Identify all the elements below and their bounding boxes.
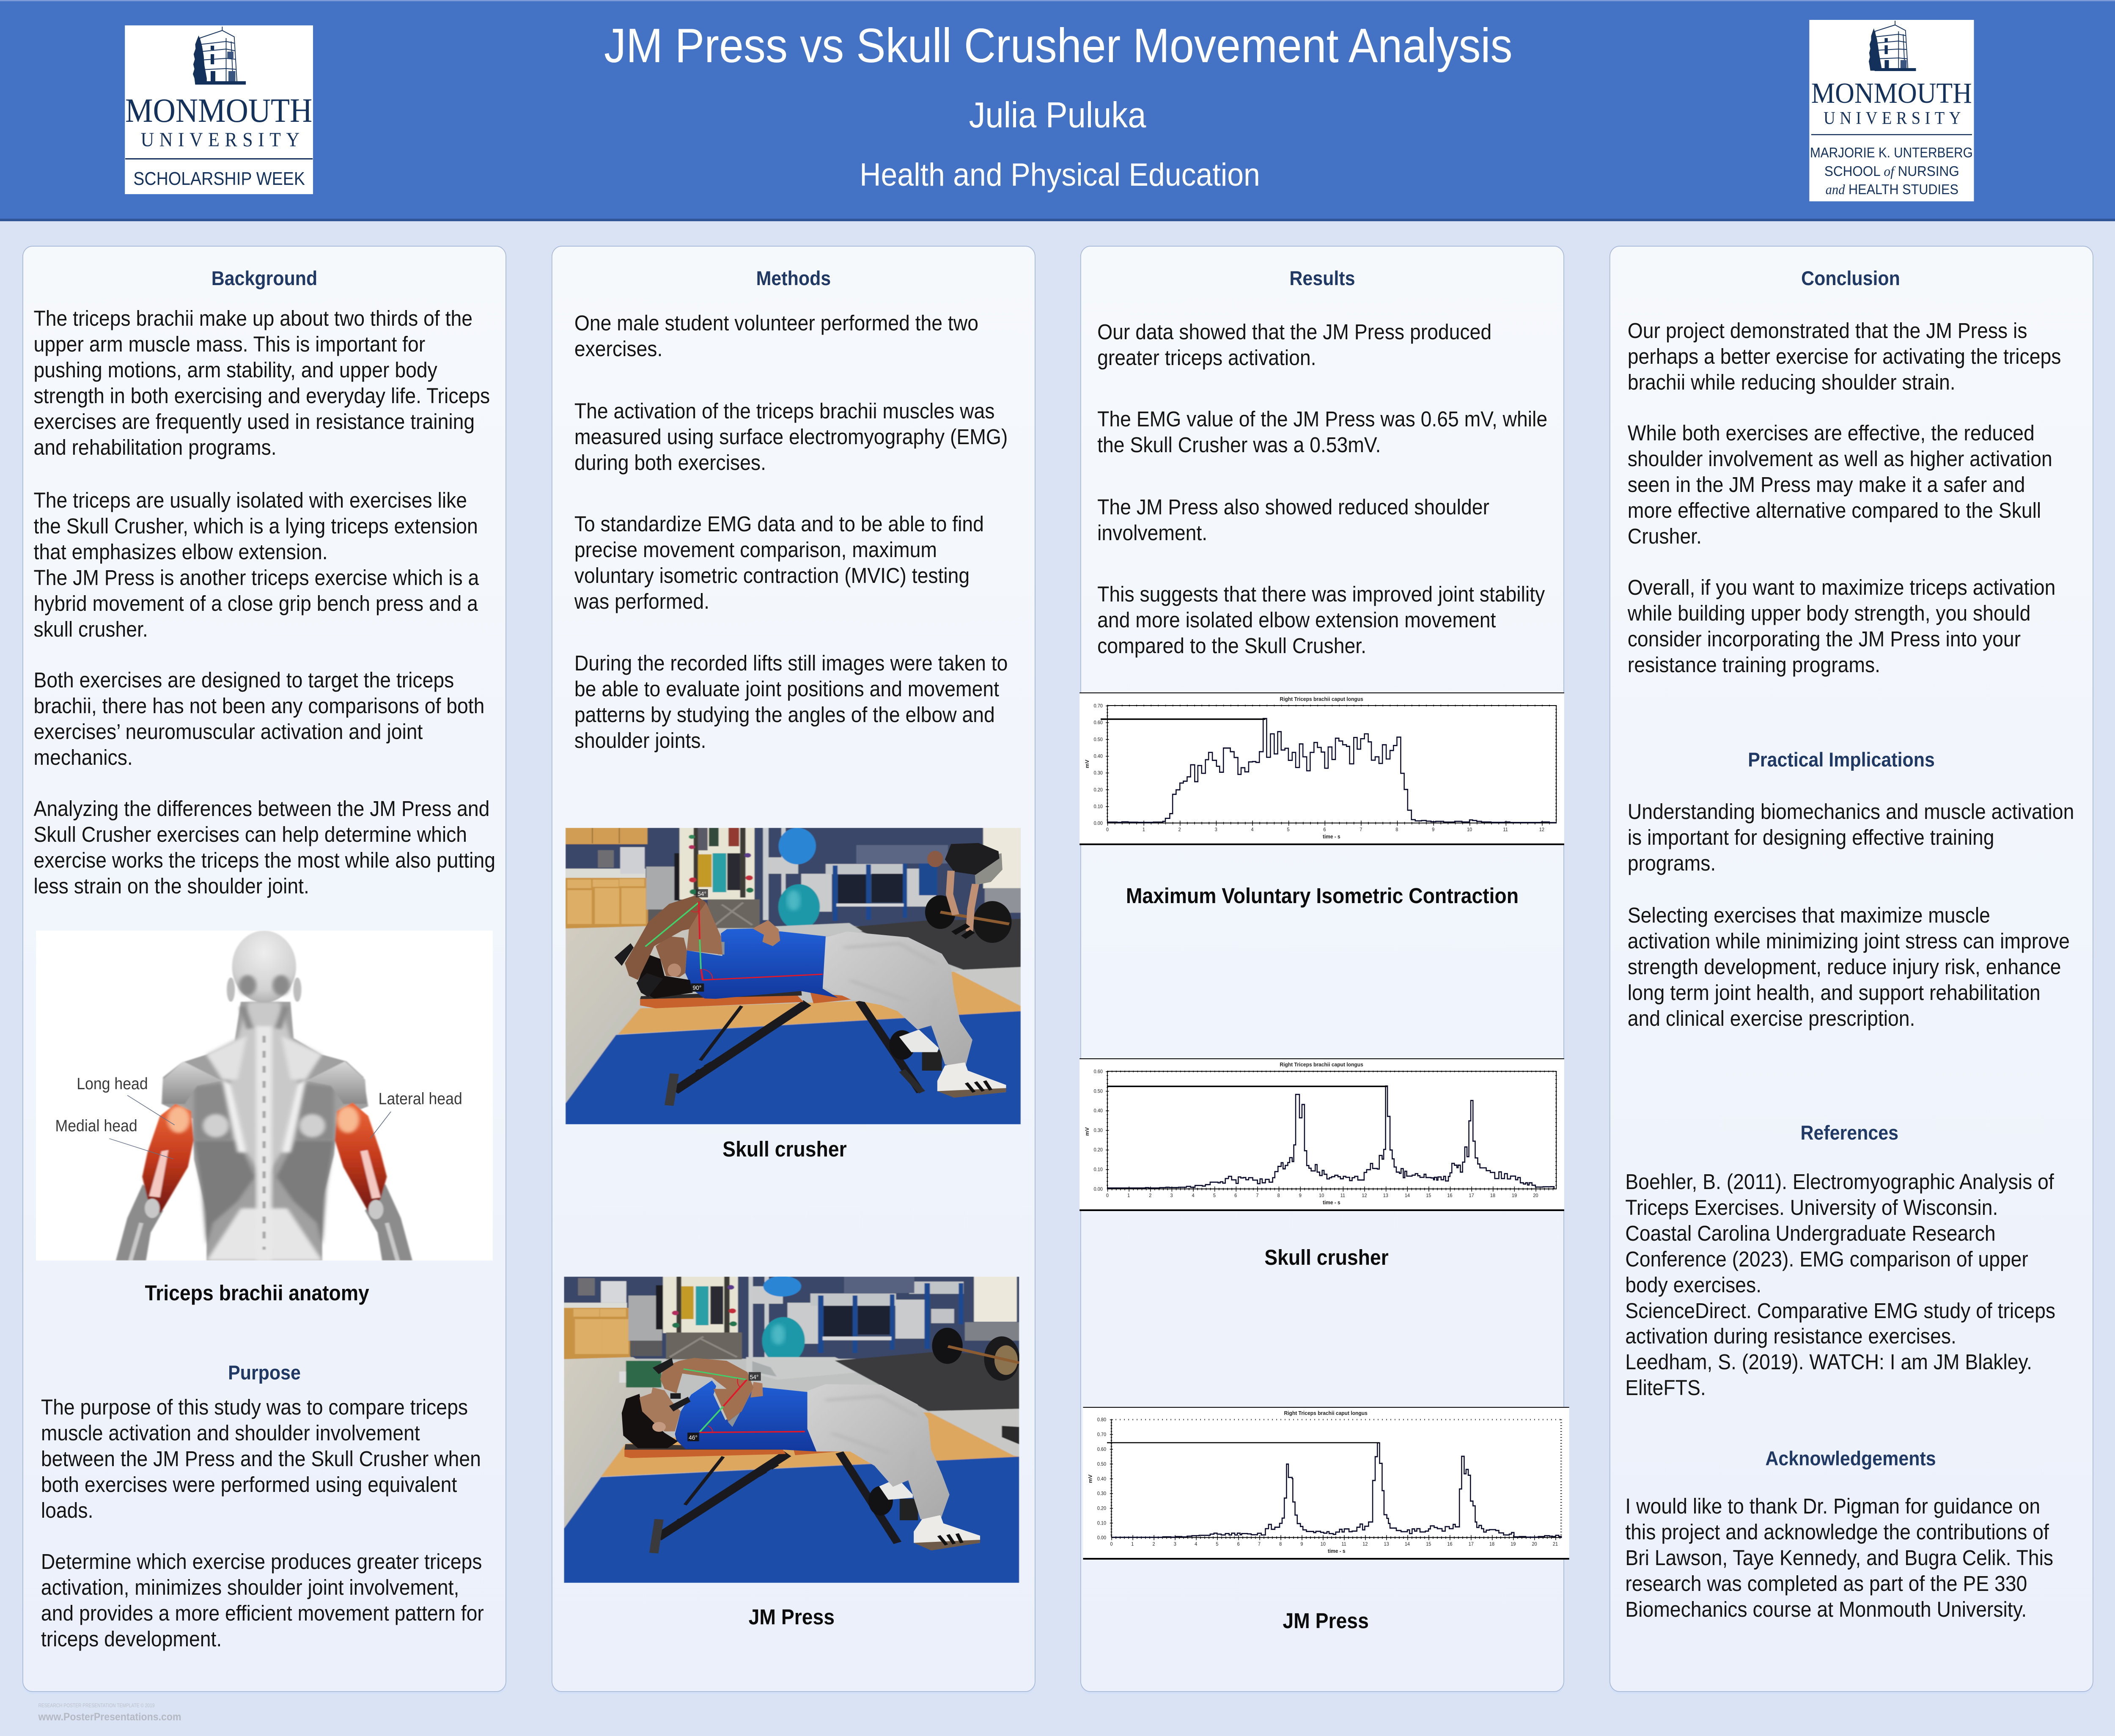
chart: maximum voluntary isometric contraction EMG: 0.60 [1094,720,1103,725]
photo: JM press with joint angles [564,1277,1019,1583]
logo: Monmouth University Scholarship Week [125,25,313,194]
department: Health and Physical Education [860,157,1260,193]
chart: JM press EMG: 6 [1237,1541,1240,1547]
chart: maximum voluntary isometric contraction EMG: 0.30 [1094,770,1103,776]
caption: JM press photo: JM Press [749,1605,835,1629]
chart: JM press EMG: 8 [1279,1541,1282,1547]
chart: maximum voluntary isometric contraction EMG: 6 [1323,827,1326,832]
text: triceps overview: exercises are frequently used in resistance training [33,409,475,434]
chart: maximum voluntary isometric contraction EMG: 10 [1467,827,1472,832]
text: conclusion statement: perhaps a better exercise for activating the triceps [1628,344,2061,368]
chart: maximum voluntary isometric contraction EMG [1079,692,1564,845]
text: safety and effectiveness: seen in the JM Press may make it a safer and [1628,472,2025,497]
text: still images: be able to evaluate joint positions and movement [574,677,999,701]
image: triceps anatomy illustration [36,931,493,1261]
chart: maximum voluntary isometric contraction EMG: Right Triceps brachii caput longus [1280,696,1363,702]
text: reference list: Triceps Exercises. University of Wisconsin. [1625,1195,1998,1220]
text: exercises described [33,488,479,642]
chart: JM press EMG [1083,1407,1569,1560]
text: triceps overview: upper arm muscle mass. This is important for [33,332,425,356]
text: research gap: brachii, there has not been any comparisons of both [33,694,484,718]
chart: JM press EMG: 0.70 [1097,1431,1106,1437]
text: rationale: exercise works the triceps the most while also putting [33,848,495,872]
text: recommendation: resistance training programs. [1628,653,1880,677]
text: interpretation: compared to the Skull Crusher. [1097,634,1366,658]
text: still images: shoulder joints. [574,728,706,753]
text: study purpose: The purpose of this study was to compare triceps [41,1395,468,1419]
text: exercise selection: Selecting exercises that maximize muscle [1628,903,1990,927]
chart: JM press EMG: 4 [1195,1541,1197,1547]
chart: skull crusher EMG [1079,1058,1564,1211]
text: acknowledgements: research was completed as part of the PE 330 [1625,1571,2027,1596]
chart: JM press EMG: 11 [1341,1541,1346,1547]
chart: maximum voluntary isometric contraction EMG: 3 [1215,827,1217,832]
chart: skull crusher EMG: 14 [1405,1192,1410,1198]
text: EMG values [1097,407,1547,458]
chart: maximum voluntary isometric contraction EMG: 0.40 [1094,753,1103,759]
chart: skull crusher EMG: 9 [1299,1192,1302,1198]
chart: skull crusher EMG: 2 [1149,1192,1152,1198]
heading: Practical Implications: Practical Implications [1748,748,1935,771]
caption: skull crusher chart: Skull crusher [1264,1245,1389,1269]
text: study aim: and provides a more efficient movement pattern for [41,1601,484,1625]
text: study aim [41,1549,484,1652]
panel: background and purpose [22,246,506,1692]
chart: skull crusher EMG: 10 [1319,1192,1324,1198]
chart: skull crusher EMG: 16 [1447,1192,1453,1198]
chart: skull crusher EMG: 8 [1277,1192,1280,1198]
text: participant: exercises. [574,337,662,361]
chart: maximum voluntary isometric contraction EMG: 9 [1432,827,1434,832]
text: MVIC testing: voluntary isometric contraction (MVIC) testing [574,563,970,588]
chart: skull crusher EMG: 0.40 [1094,1107,1103,1113]
logo: Monmouth University Scholarship Week: MONMOUTH [125,92,312,129]
joint angle overlays: 54° [750,1374,758,1381]
chart: skull crusher EMG: 17 [1469,1192,1474,1198]
logo: Monmouth University School of Nursing: SCHOOL of NURSING [1824,163,1959,179]
chart: maximum voluntary isometric contraction EMG: mV [1084,760,1090,768]
text: exercises described: The JM Press is another triceps exercise which is a [33,566,479,590]
text: safety and effectiveness: While both exercises are effective, the reduced [1628,421,2035,445]
anatomy labels: Long head [77,1075,148,1093]
chart: JM press EMG: Right Triceps brachii caput longus [1284,1410,1368,1416]
author: Julia Puluka [969,95,1146,135]
chart: skull crusher EMG: 13 [1383,1192,1388,1198]
text: key result: Our data showed that the JM Press produced [1097,320,1491,344]
chart: JM press EMG: 17 [1469,1541,1474,1547]
chart: maximum voluntary isometric contraction EMG: 0.70 [1094,703,1103,709]
panel: results [1080,246,1564,1692]
background lifter and barbell [925,843,1012,943]
chart: JM press EMG: 0 [1110,1541,1113,1547]
text: research gap: Both exercises are designed to target the triceps [33,668,454,692]
chart: skull crusher EMG: 15 [1426,1192,1431,1198]
anatomy labels: Lateral head [379,1090,462,1108]
joint angle overlays [645,889,823,992]
text: biomechanics importance: is important for designing effective training [1628,825,1994,849]
joint angle overlays: 90° [693,984,701,992]
text: MVIC testing [574,511,984,615]
text: EMG values: The EMG value of the JM Press was 0.65 mV, while [1097,407,1547,431]
logo: Monmouth University School of Nursing: UNIVERSITY [1824,109,1961,128]
chart: maximum voluntary isometric contraction EMG: 2 [1178,827,1181,832]
text: conclusion statement: Our project demonstrated that the JM Press is [1628,319,2027,343]
text: triceps overview: and rehabilitation programs. [33,435,277,459]
text: participant [574,310,978,362]
text: reference list: body exercises. [1625,1273,1761,1297]
logo: Monmouth University Scholarship Week: UNIVERSITY [141,129,299,151]
heading: References: References [1800,1121,1898,1144]
chart: skull crusher EMG: 0.60 [1094,1069,1103,1074]
footer watermark: www.PosterPresentations.com [38,1711,181,1723]
subject: JM press position [622,1358,980,1550]
chart: JM press EMG: 0.80 [1097,1417,1106,1423]
joint angle overlays: 54° [698,890,706,898]
text: study aim: Determine which exercise produces greater triceps [41,1549,482,1574]
text: exercise selection: strength development, reduce injury risk, enhance [1628,955,2061,979]
text: exercises described: hybrid movement of a close grip bench press and a [33,591,478,615]
text: reference list: Leedham, S. (2019). WATCH: I am JM Blakley. [1625,1350,2032,1374]
logo: Monmouth University School of Nursing: MONMOUTH [1811,77,1972,109]
text: MVIC testing: precise movement comparison, maximum [574,538,937,562]
text: reference list: ScienceDirect. Comparative EMG study of triceps [1625,1299,2055,1323]
text: study aim: triceps development. [41,1627,222,1651]
caption: JM press chart: JM Press [1283,1609,1369,1633]
subject: skull crusher position [614,895,1006,1098]
text: rationale: Skull Crusher exercises can help determine which [33,822,467,846]
chart: maximum voluntary isometric contraction EMG: time - s [1323,833,1340,840]
chart: skull crusher EMG: 1 [1127,1192,1130,1198]
joint angle overlays: 46° [689,1434,698,1441]
text: reference list [1625,1169,2055,1401]
heading: Acknowledgements: Acknowledgements [1765,1447,1936,1470]
chart: maximum voluntary isometric contraction EMG: 0.50 [1094,736,1103,742]
text: interpretation [1097,582,1545,659]
text: recommendation: Overall, if you want to maximize triceps activation [1628,575,2055,599]
chart: maximum voluntary isometric contraction EMG: 7 [1360,827,1362,832]
text: triceps overview: strength in both exercising and everyday life. Triceps [33,384,490,408]
footer watermark: RESEARCH POSTER PRESENTATION TEMPLATE © 2019 [38,1702,154,1709]
chart: JM press EMG: 13 [1384,1541,1389,1547]
text: exercises described: the Skull Crusher, which is a lying triceps extension [33,514,478,538]
text: exercise selection: long term joint health, and support rehabilitation [1628,981,2041,1005]
text: safety and effectiveness [1628,420,2052,549]
text: exercises described: that emphasizes elbow extension. [33,540,328,564]
chart: JM press EMG: time - s [1328,1548,1346,1554]
text: EMG measurement: measured using surface electromyography (EMG) [574,425,1008,449]
text: recommendation: while building upper body strength, you should [1628,601,2030,625]
chart: skull crusher EMG: 0.30 [1094,1127,1103,1133]
text: study purpose: muscle activation and shoulder involvement [41,1421,420,1445]
chart: skull crusher EMG: time - s [1323,1199,1340,1206]
chart: maximum voluntary isometric contraction EMG: 12 [1539,827,1544,832]
text: acknowledgements: Bri Lawson, Taye Kennedy, and Bugra Celik. This [1625,1546,2053,1570]
chart: maximum voluntary isometric contraction EMG: 0 [1106,827,1109,832]
chart: JM press EMG: 16 [1447,1541,1453,1547]
text: study purpose: both exercises were performed using equivalent [41,1472,457,1497]
chart: JM press EMG: 0.40 [1097,1476,1106,1482]
chart: JM press EMG: 19 [1511,1541,1516,1547]
text: still images [574,651,1008,754]
text: study purpose: loads. [41,1498,93,1522]
chart: skull crusher EMG: 4 [1192,1192,1195,1198]
chart: skull crusher EMG: 5 [1213,1192,1216,1198]
logo: Monmouth University School of Nursing: MARJORIE K. UNTERBERG [1810,145,1973,160]
chart: JM press EMG: 21 [1553,1541,1558,1547]
text: key result: greater triceps activation. [1097,346,1316,370]
chart: skull crusher EMG: 11 [1340,1192,1345,1198]
logo: Monmouth University School of Nursing [1809,20,1974,201]
text: triceps overview: pushing motions, arm stability, and upper body [33,358,437,382]
text: conclusion statement [1628,318,2061,396]
text: key result [1097,319,1491,371]
chart: JM press EMG: 14 [1405,1541,1410,1547]
caption: triceps anatomy: Triceps brachii anatomy [145,1281,369,1305]
chart: maximum voluntary isometric contraction EMG: 0.10 [1094,804,1103,810]
text: MVIC testing: was performed. [574,589,709,613]
chart: skull crusher EMG: 0.10 [1094,1166,1103,1172]
chart: maximum voluntary isometric contraction EMG: 0.20 [1094,787,1103,793]
heading: Purpose: Purpose [228,1361,301,1384]
text: rationale: less strain on the shoulder joint. [33,874,309,898]
text: EMG values: the Skull Crusher was a 0.53mV. [1097,433,1381,457]
heading: Background: Background [212,267,317,289]
text: safety and effectiveness: shoulder involvement as well as higher activation [1628,447,2052,471]
text: rationale [33,796,495,899]
joint angle overlays [684,1369,805,1441]
chart: skull crusher EMG: 0.20 [1094,1146,1103,1152]
chart: JM press EMG: 5 [1216,1541,1219,1547]
chart: skull crusher EMG: 12 [1362,1192,1367,1198]
bench [640,989,942,1105]
caption: MVIC chart: Maximum Voluntary Isometric Contraction [1126,884,1519,908]
text: acknowledgements: I would like to thank Dr. Pigman for guidance on [1625,1494,2040,1518]
text: reference list: EliteFTS. [1625,1376,1706,1400]
anatomy labels: Medial head [55,1117,137,1135]
panel: conclusion, implications, references, acknowledgements [1610,246,2093,1692]
chart: maximum voluntary isometric contraction EMG: 8 [1395,827,1398,832]
text: reference list: Boehler, B. (2011). Electromyographic Analysis of [1625,1170,2054,1194]
text: exercises described: skull crusher. [33,617,148,641]
chart: skull crusher EMG: 6 [1234,1192,1237,1198]
chart: skull crusher EMG: 7 [1256,1192,1259,1198]
text: conclusion statement: brachii while reducing shoulder strain. [1628,370,1956,394]
chart: JM press EMG: 15 [1426,1541,1431,1547]
text: safety and effectiveness: more effective alternative compared to the Skull [1628,498,2041,522]
chart: JM press EMG: 10 [1321,1541,1326,1547]
chart: maximum voluntary isometric contraction EMG: 0.00 [1094,820,1103,826]
text: MVIC testing: To standardize EMG data and to be able to find [574,512,984,536]
text: shoulder involvement [1097,494,1489,546]
text: shoulder involvement: involvement. [1097,521,1207,545]
text: study purpose: between the JM Press and the Skull Crusher when [41,1447,481,1471]
chart: JM press EMG: 0.10 [1097,1520,1106,1526]
text: EMG measurement: The activation of the triceps brachii muscles was [574,399,994,423]
chart: maximum voluntary isometric contraction EMG: 11 [1503,827,1508,832]
text: biomechanics importance: programs. [1628,851,1716,875]
chart: maximum voluntary isometric contraction EMG: 5 [1287,827,1290,832]
chart: JM press EMG: 7 [1258,1541,1261,1547]
chart: JM press EMG: 18 [1489,1541,1494,1547]
text: study aim: activation, minimizes shoulder joint involvement, [41,1575,459,1599]
text: acknowledgements: Biomechanics course at Monmouth University. [1625,1597,2027,1621]
heading: Conclusion: Conclusion [1801,267,1900,289]
text: recommendation [1628,575,2055,678]
photo: skull crusher with joint angles [566,828,1021,1124]
text: acknowledgements [1625,1494,2053,1623]
heading: Methods: Methods [756,267,831,289]
chart: JM press EMG: 20 [1532,1541,1537,1547]
chart: maximum voluntary isometric contraction EMG: 1 [1143,827,1145,832]
logo: Monmouth University Scholarship Week: SCHOLARSHIP WEEK [133,168,305,189]
chart: JM press EMG: mV [1087,1475,1093,1483]
header banner [0,0,2115,221]
chart: JM press EMG: 3 [1174,1541,1176,1547]
text: research gap [33,667,484,771]
text: research gap: exercises’ neuromuscular activation and joint [33,720,423,744]
text: triceps overview: The triceps brachii make up about two thirds of the [33,306,472,330]
text: biomechanics importance: Understanding biomechanics and muscle activation [1628,799,2074,824]
caption: skull crusher photo: Skull crusher [722,1137,847,1161]
chart: JM press EMG: 9 [1300,1541,1303,1547]
text: exercise selection [1628,903,2070,1032]
text: shoulder involvement: The JM Press also showed reduced shoulder [1097,495,1489,519]
text: rationale: Analyzing the differences between the JM Press and [33,797,489,821]
chart: JM press EMG: 2 [1152,1541,1155,1547]
text: exercise selection: and clinical exercise prescription. [1628,1006,1915,1030]
chart: JM press EMG: 0.00 [1097,1535,1106,1541]
text: triceps overview [33,306,490,460]
anatomy labels [55,1075,462,1159]
chart: JM press EMG: 0.30 [1097,1491,1106,1497]
barbell in background [932,1328,1019,1381]
chart: JM press EMG: 1 [1131,1541,1134,1547]
chart: skull crusher EMG: 0.00 [1094,1186,1103,1192]
text: study purpose [41,1395,481,1524]
chart: skull crusher EMG: mV [1084,1127,1090,1136]
heading: Results: Results [1289,267,1355,289]
text: EMG measurement: during both exercises. [574,450,766,475]
text: research gap: mechanics. [33,745,133,769]
panel: methods [552,246,1036,1692]
chart: JM press EMG: 0.50 [1097,1461,1106,1467]
chart: skull crusher EMG: 20 [1533,1192,1538,1198]
text: interpretation: This suggests that there was improved joint stability [1097,582,1545,606]
text: reference list: Coastal Carolina Undergraduate Research [1625,1221,1996,1245]
chart: JM press EMG: 0.60 [1097,1446,1106,1452]
text: acknowledgements: this project and acknowledge the contributions of [1625,1520,2049,1544]
text: recommendation: consider incorporating the JM Press into your [1628,627,2021,651]
text: biomechanics importance [1628,799,2074,876]
logo: Monmouth University School of Nursing: and HEALTH STUDIES [1826,181,1958,198]
bench [624,1444,918,1553]
chart: skull crusher EMG: 3 [1170,1192,1173,1198]
text: still images: patterns by studying the angles of the elbow and [574,703,995,727]
chart: skull crusher EMG: 18 [1490,1192,1495,1198]
chart: JM press EMG: 0.20 [1097,1505,1106,1511]
chart: skull crusher EMG: 19 [1512,1192,1517,1198]
text: EMG measurement [574,398,1008,476]
title: JM Press vs Skull Crusher Movement Analysis [604,19,1513,73]
text: interpretation: and more isolated elbow extension movement [1097,608,1496,632]
text: participant: One male student volunteer performed the two [574,311,978,335]
chart: skull crusher EMG: 0 [1106,1192,1109,1198]
text: still images: During the recorded lifts still images were taken to [574,651,1008,675]
text: exercise selection: activation while minimizing joint stress can improve [1628,929,2070,953]
text: safety and effectiveness: Crusher. [1628,524,1702,548]
text: exercises described: The triceps are usually isolated with exercises like [33,488,467,512]
text: reference list: Conference (2023). EMG comparison of upper [1625,1247,2028,1271]
text: reference list: activation during resistance exercises. [1625,1324,1956,1348]
chart: maximum voluntary isometric contraction EMG: 4 [1251,827,1254,832]
chart: skull crusher EMG: 0.50 [1094,1088,1103,1094]
chart: JM press EMG: 12 [1362,1541,1368,1547]
chart: skull crusher EMG: Right Triceps brachii caput longus [1280,1061,1363,1068]
footer watermark [37,1700,191,1726]
